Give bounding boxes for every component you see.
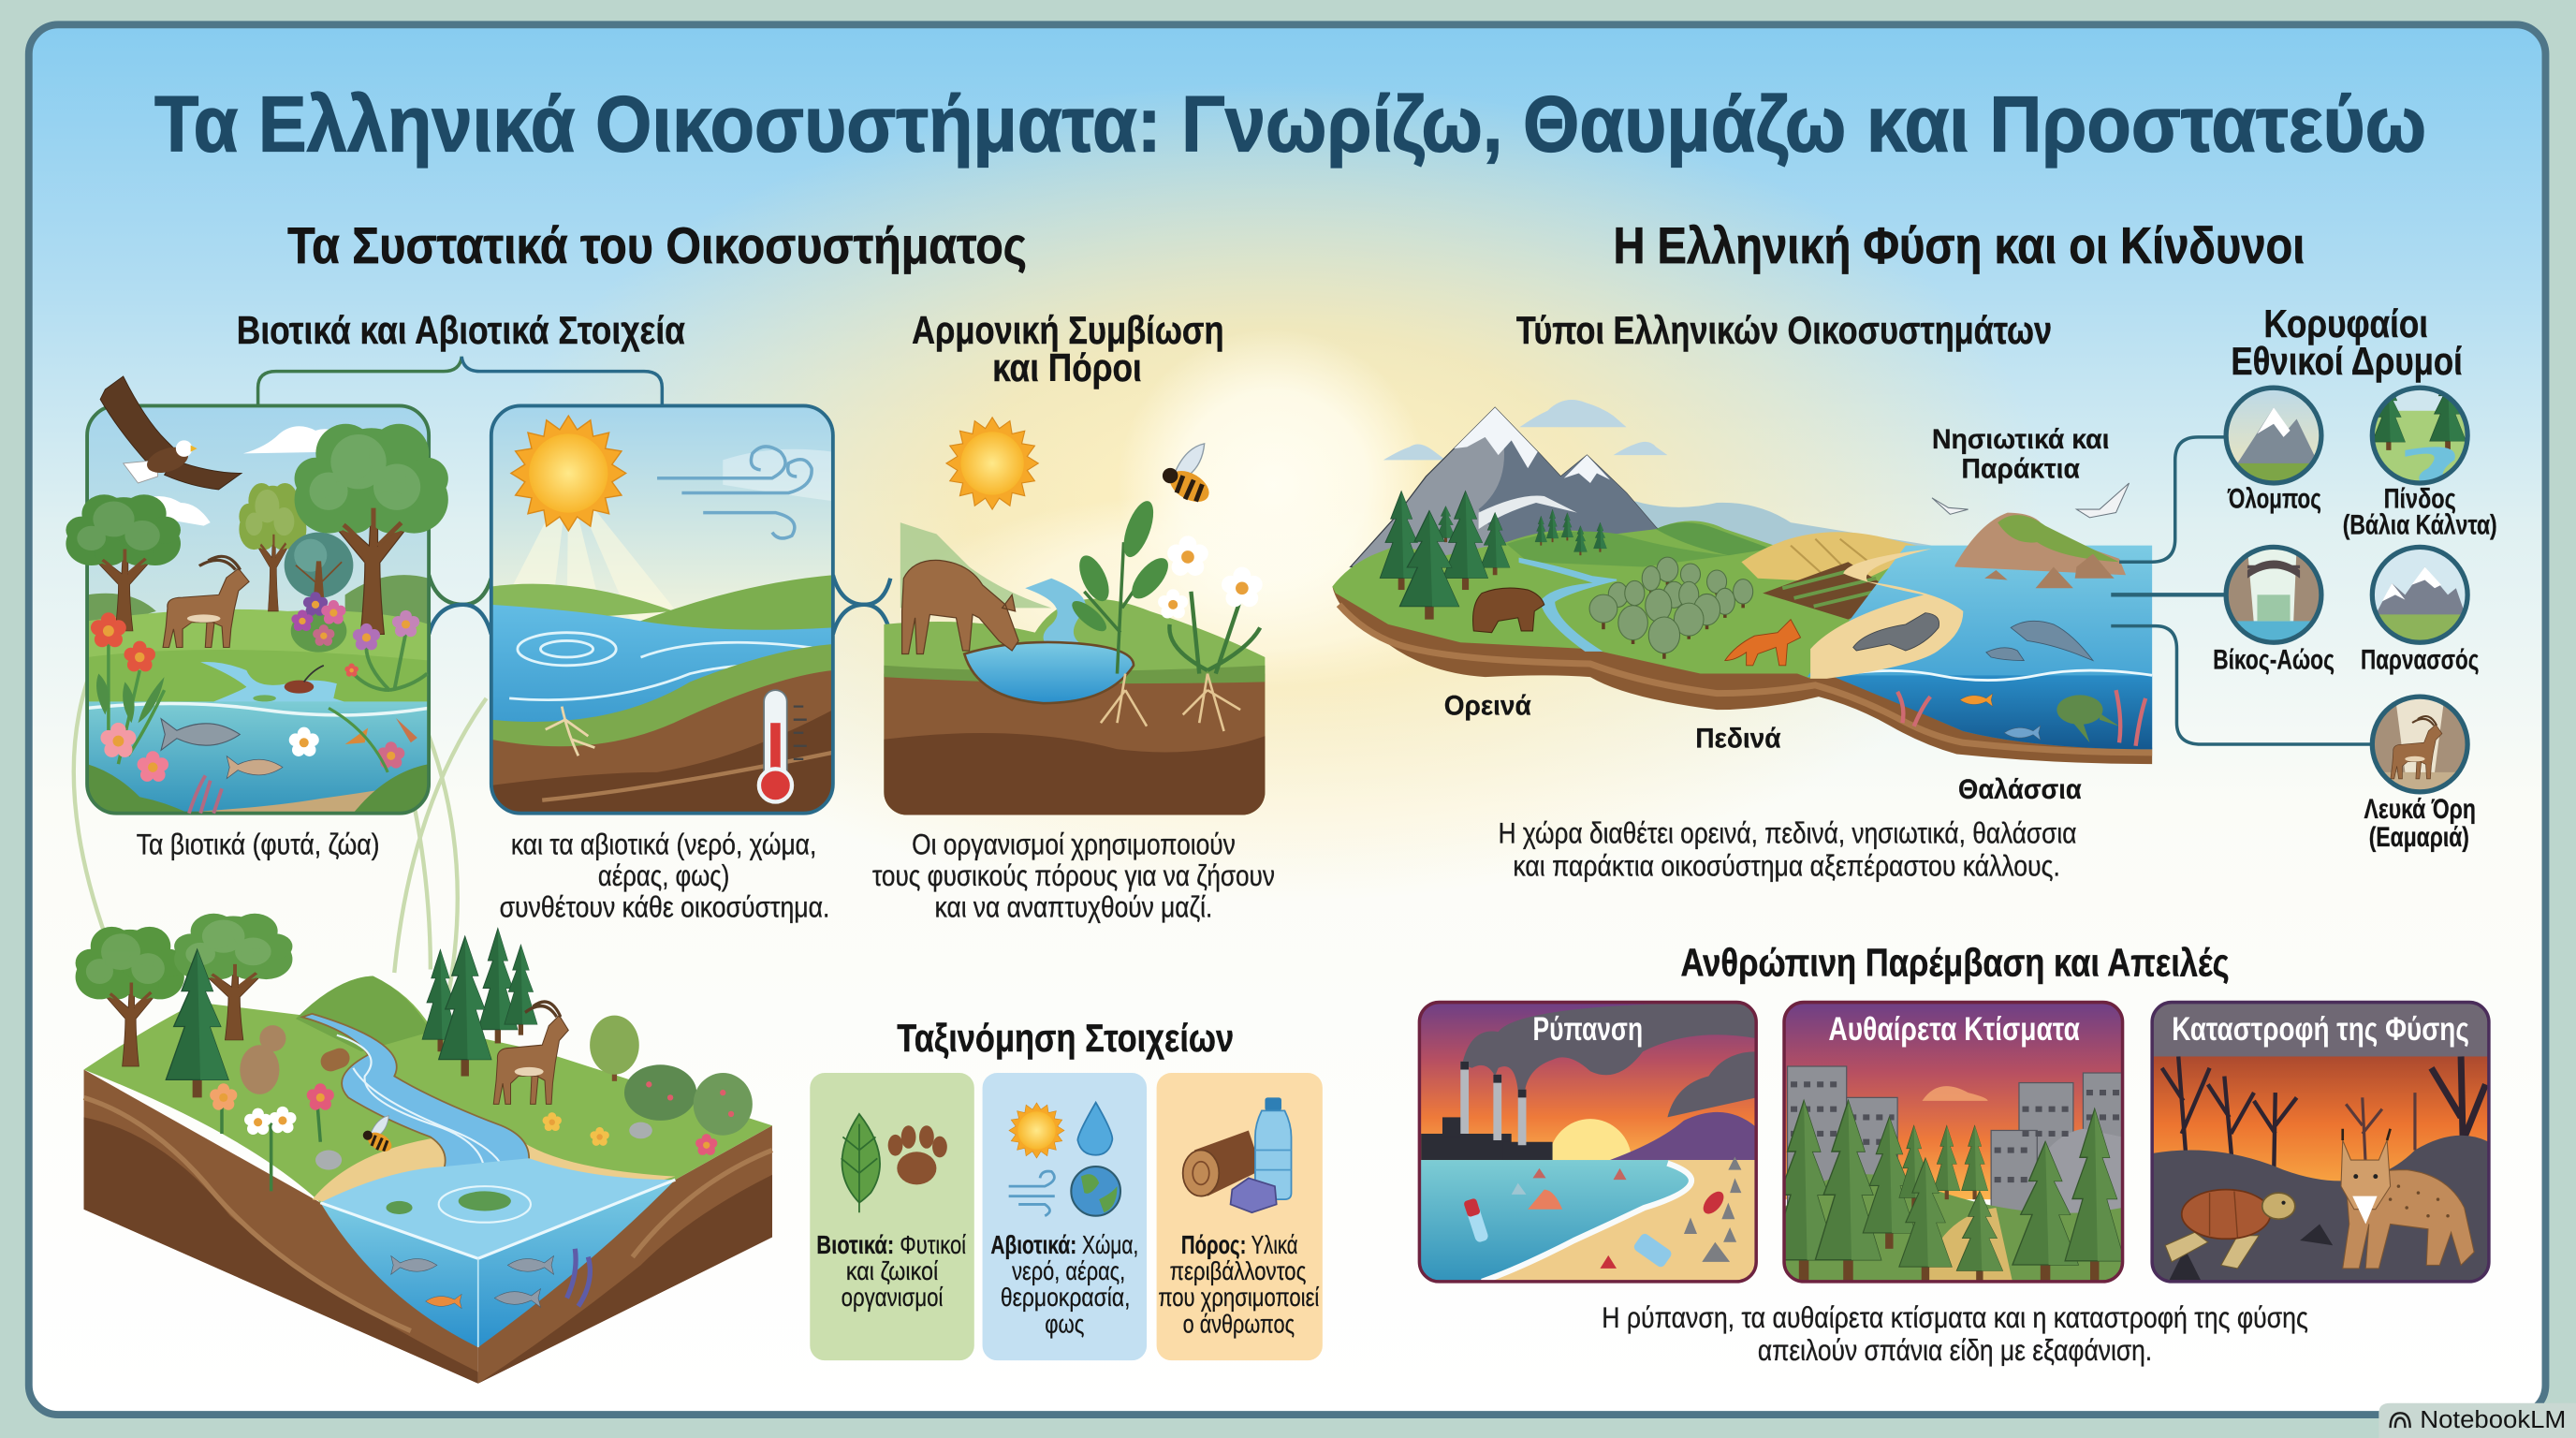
threat card: pollution [1419, 1003, 1756, 1282]
card text: και ζωικοί [846, 1256, 938, 1285]
card: abiotic [983, 1073, 1147, 1360]
isometric ecosystem block [76, 914, 772, 1384]
left soil [84, 1070, 478, 1384]
section heading: Greek nature: Η Ελληνική Φύση και οι Κίνδυνοι [1613, 217, 2305, 274]
connector: faint roots to island [74, 682, 487, 1003]
connectors: map to parks [2111, 437, 2374, 744]
park: Olympos [2226, 388, 2323, 514]
card text [1158, 1230, 1319, 1338]
caption: abiotic: και τα αβιοτικά (νερό, χώμα, [511, 828, 816, 861]
rolling hills [1506, 522, 1771, 566]
card text [990, 1230, 1138, 1338]
grass top [84, 976, 772, 1258]
card text: ο άνθρωπος [1183, 1309, 1295, 1338]
caption: symbiosis: και να αναπτυχθούν μαζί. [935, 889, 1212, 923]
card text: περιβάλλοντος [1170, 1256, 1306, 1285]
card text [816, 1230, 966, 1312]
park: Lefka Ori [2364, 697, 2476, 853]
panel: abiotic [491, 405, 833, 814]
icon: paw [888, 1125, 947, 1184]
eagle [100, 376, 242, 490]
caption: biotic: Τα βιοτικά (φυτά, ζώα) [137, 828, 379, 861]
icon: globe [1071, 1167, 1120, 1216]
title: Τα Ελληνικά Οικοσυστήματα: Γνωρίζω, Θαυμάζω και Προστατεύω [154, 80, 2426, 168]
fish in block [391, 1249, 590, 1309]
label: mountain: Ορεινά [1444, 690, 1531, 721]
bushes [624, 1064, 753, 1136]
water top and faces [320, 1158, 675, 1347]
roots [1101, 674, 1240, 731]
sea life [1897, 690, 2145, 746]
card: biotic [810, 1073, 974, 1360]
flowers on block [210, 1083, 717, 1191]
underwater [1830, 675, 2152, 749]
right soil [478, 1125, 772, 1384]
subheading: harmony: και Πόροι [992, 345, 1142, 389]
caption: abiotic [500, 828, 829, 923]
river [1519, 559, 1617, 651]
farmland [1741, 532, 1930, 620]
warm sunlight glow [33, 66, 2541, 953]
icon: drop [1077, 1103, 1112, 1155]
threat card: destruction of nature: Καταστροφή της Φύσης [2172, 1011, 2469, 1048]
label: islands and coast [1932, 424, 2110, 485]
caption: symbiosis: Οι οργανισμοί χρησιμοποιούν [912, 828, 1236, 861]
bee [1163, 444, 1214, 508]
river streaks [337, 1035, 506, 1177]
card text: θερμοκρασία, [1001, 1283, 1131, 1312]
card text: που χρησιμοποιεί [1158, 1283, 1319, 1312]
seal [1853, 613, 1939, 651]
river [302, 1014, 529, 1186]
wildflowers and plants [91, 592, 427, 814]
caption: symbiosis: τους φυσικούς πόρους για να ζήσουν [872, 858, 1275, 892]
lynx [2341, 1129, 2474, 1269]
card text: νερό, αέρας, [1012, 1256, 1125, 1285]
caption: abiotic: συνθέτουν κάθε οικοσύστημα. [500, 889, 829, 923]
distant hills [1634, 501, 1932, 550]
card text: Αβιοτικά: Χώμα, [990, 1230, 1138, 1259]
section heading: components: Τα Συστατικά του Οικοσυστήματος [287, 217, 1027, 274]
park: Pindos [2343, 374, 2497, 540]
trees and pines [76, 914, 639, 1097]
caption: Greek ecosystems: Η χώρα διαθέτει ορεινά, πεδινά, νησιωτικά, θαλάσσια [1499, 815, 2076, 849]
icon: small sun [1009, 1103, 1064, 1158]
threat card: illegal buildings: Αυθαίρετα Κτίσματα [1828, 1011, 2080, 1048]
card text: φως [1045, 1309, 1084, 1338]
icon: wind [1009, 1171, 1055, 1216]
subheading: biotic and abiotic: Βιοτικά και Αβιοτικά Στοιχεία [237, 308, 685, 352]
thermometer [759, 690, 807, 801]
park: Vikos-Aoos [2213, 547, 2334, 675]
park: Olympos: Όλομπος [2227, 483, 2321, 514]
label: islands and coast: Παράκτια [1962, 454, 2081, 485]
caption: Greek ecosystems: και παράκτια οικοσύστημα αξεπέραστου κάλλους. [1513, 848, 2060, 882]
fox [1725, 620, 1801, 666]
sun [511, 416, 626, 531]
caption: symbiosis [872, 828, 1275, 923]
park: Vikos-Aoos: Βίκος-Αώος [2213, 644, 2334, 675]
bear [1473, 588, 1544, 633]
ibex on block [493, 1002, 568, 1104]
label: islands and coast: Νησιωτικά και [1932, 424, 2110, 455]
roots [546, 707, 594, 756]
park: Parnassos [2361, 547, 2479, 675]
park: Lefka Ori: Λευκά Όρη [2364, 794, 2476, 825]
wind swirls [657, 447, 812, 538]
sand banks [313, 1137, 675, 1208]
heading: human intervention: Ανθρώπινη Παρέμβαση και Απειλές [1680, 940, 2230, 984]
park: Pindos: (Βάλια Κάλντα) [2343, 509, 2497, 540]
card text: Πόρος: Υλικά [1181, 1230, 1298, 1259]
clouds [1383, 400, 1667, 460]
dolphins [1986, 621, 2093, 661]
ibex [163, 556, 249, 647]
subheading: national parks [2231, 301, 2463, 383]
threat card: destruction of nature [2152, 1003, 2489, 1282]
card: resource [1157, 1073, 1323, 1360]
park: Pindos: Πίνδος [2384, 483, 2456, 514]
grazing deer [902, 560, 1018, 654]
plants [1068, 497, 1260, 674]
park: Lefka Ori: (Εαμαριά) [2369, 822, 2469, 853]
fish [161, 719, 283, 779]
mountains [1351, 407, 1692, 566]
subheading: national parks: Εθνικοί Δρυμοί [2231, 339, 2463, 383]
icon: log [1183, 1130, 1262, 1196]
caption: Greek ecosystems [1499, 815, 2076, 882]
park: Parnassos: Παρνασσός [2361, 644, 2479, 675]
white flowers [1158, 536, 1263, 619]
pine forest [1380, 492, 1606, 620]
panel: biotic [66, 376, 448, 814]
watermark badge: NotebookLM [2420, 1405, 2566, 1433]
watermark badge [2378, 1403, 2576, 1438]
olive grove [1589, 557, 1753, 659]
subheading: national parks: Κορυφαίοι [2263, 301, 2428, 345]
card text: οργανισμοί [842, 1283, 943, 1312]
earth edge [1332, 587, 2152, 764]
sun [946, 418, 1038, 509]
caption: threats [1602, 1300, 2308, 1367]
sea [1808, 546, 2152, 749]
icon: bottle [1255, 1097, 1292, 1199]
heading: classification: Ταξινόμηση Στοιχείων [897, 1016, 1234, 1060]
hill shade [296, 976, 431, 1051]
stream and pond [964, 579, 1134, 703]
panel: harmonious symbiosis [884, 418, 1265, 814]
threat card: pollution: Ρύπανση [1532, 1011, 1643, 1048]
threat card: illegal buildings [1771, 1003, 2124, 1282]
caption: threats: Η ρύπανση, τα αυθαίρετα κτίσματα και η καταστροφή της φύσης [1602, 1300, 2308, 1334]
subheading: harmony: Αρμονική Συμβίωση [912, 308, 1224, 352]
card text: Βιοτικά: Φυτικοί [816, 1230, 966, 1259]
icon: leaf [842, 1114, 880, 1212]
label: marine: Θαλάσσια [1958, 774, 2082, 805]
seagulls [1932, 483, 2130, 518]
label: plain: Πεδινά [1695, 724, 1781, 755]
subheading: ecosystem types: Τύποι Ελληνικών Οικοσυστημάτων [1516, 308, 2052, 352]
trees [66, 424, 448, 634]
connector: side braces [429, 575, 890, 634]
island [1955, 513, 2126, 588]
beach [1810, 549, 1963, 679]
turtle [2165, 1190, 2295, 1269]
rabbit and log [240, 1025, 353, 1094]
caption: threats: απειλούν σπάνια είδη με εξαφάνιση. [1758, 1333, 2152, 1367]
caption: abiotic: αέρας, φως) [598, 858, 729, 892]
Greece landscape map [1332, 400, 2152, 764]
icon: mineral [1231, 1178, 1277, 1212]
connector: top bracket [258, 357, 662, 405]
subheading: harmony [912, 308, 1224, 389]
land surface [1332, 521, 1932, 679]
